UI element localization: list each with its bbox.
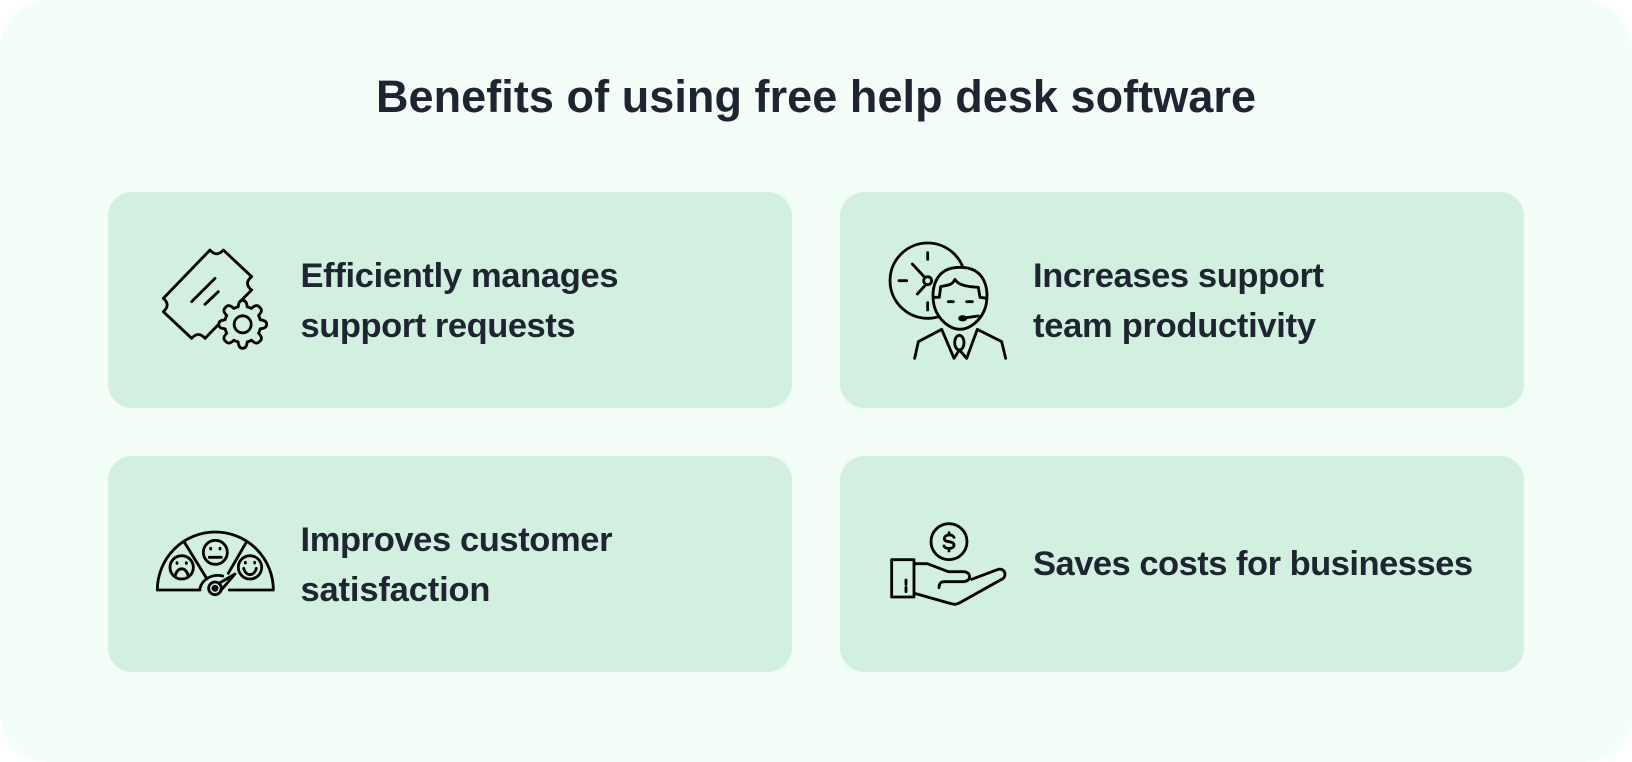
panel: saves costs for businesses bbox=[840, 456, 1524, 672]
text: improves customer satisfaction: Improves customer bbox=[300, 521, 612, 559]
text: efficiently manages support requests: support requests bbox=[300, 307, 576, 345]
title: Benefits of using free help desk software bbox=[376, 71, 1256, 122]
icon: hand holding coin bbox=[892, 524, 1005, 604]
panel: improves customer satisfaction bbox=[108, 456, 792, 672]
text: increases support team productivity bbox=[1033, 257, 1324, 345]
icon: ticket with gear bbox=[163, 250, 267, 348]
text: increases support team productivity: team productivity bbox=[1033, 307, 1316, 345]
panel: increases support team productivity bbox=[840, 192, 1524, 408]
text: efficiently manages support requests bbox=[300, 257, 618, 345]
text: efficiently manages support requests: Efficiently manages bbox=[300, 257, 618, 295]
text: saves costs for businesses: Saves costs for businesses bbox=[1033, 545, 1473, 583]
text: increases support team productivity: Increases support bbox=[1033, 257, 1324, 295]
icon: support agent with clock bbox=[890, 243, 1006, 358]
panel: efficiently manages support requests bbox=[108, 192, 792, 408]
icon: satisfaction gauge with faces bbox=[157, 532, 273, 595]
text: improves customer satisfaction: satisfaction bbox=[300, 571, 490, 609]
text: improves customer satisfaction bbox=[300, 521, 612, 609]
